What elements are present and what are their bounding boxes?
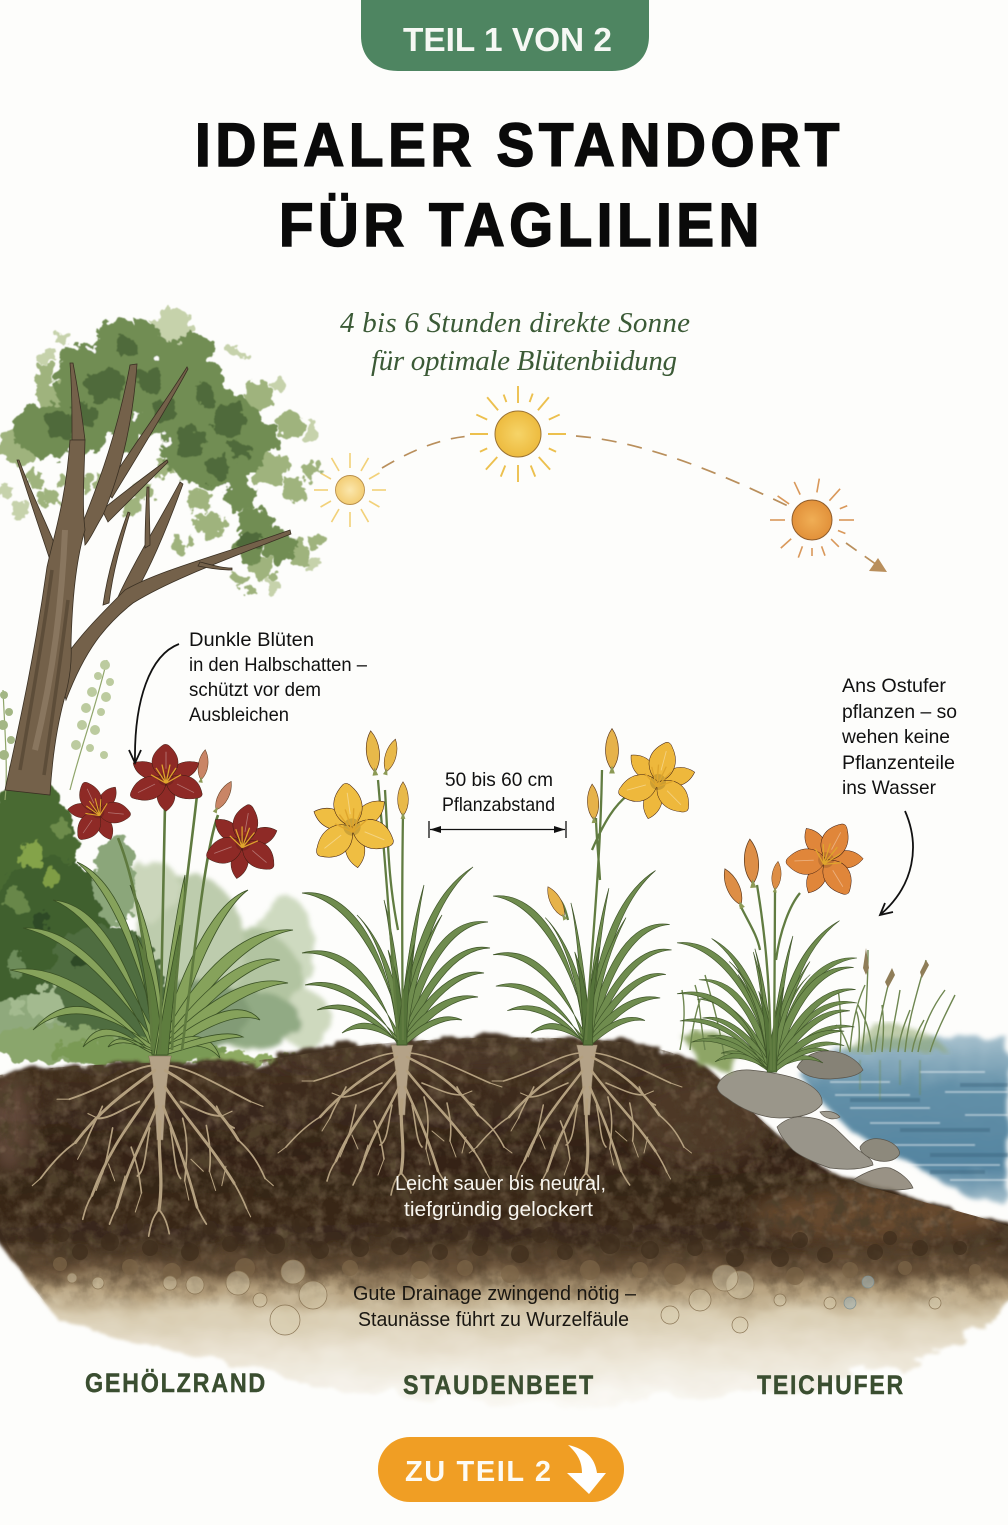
callout: dark flowers in partial shade: in den Halbschatten – [189,654,367,676]
callout: dark flowers in partial shade: Ausbleichen [189,704,289,726]
sun: morning [314,453,386,527]
tree crown [0,308,322,595]
grass strip and reeds at pond [680,948,955,1072]
sun: evening [770,479,854,558]
flowers [54,744,289,886]
pond water [800,1037,1008,1207]
rocks on shore [717,1051,913,1190]
soil note: Leicht sauer bis neutral, [395,1172,606,1195]
drainage note: Staunässe führt zu Wurzelfäule [358,1309,629,1331]
callout: east shore planting: Ans Ostufer [842,675,946,697]
title: FÜR TAGLILIEN [279,191,764,259]
badge: Teil 1 von 2 [361,0,649,71]
sun: midday [470,386,566,482]
icon: curved down arrow [567,1445,606,1494]
location labels: TEICHUFER [757,1370,905,1400]
soil note [395,1172,606,1221]
plant: orange daylily at pond [677,806,881,1072]
soil note: tiefgründig gelockert [404,1198,593,1221]
callout: dark flowers in partial shade [129,629,367,763]
callout: east shore planting [841,675,957,915]
soil cross-section [0,1030,1008,1408]
badge: Teil 1 von 2: TEIL 1 VON 2 [403,21,612,58]
arrow to red flowers [129,644,179,763]
callout: east shore planting: wehen keine [841,726,950,748]
callout: east shore planting: Pflanzenteile [842,752,955,774]
tree trunk and branches [5,363,291,795]
drainage note [353,1283,637,1331]
background shrubs [0,780,330,1067]
fern sprigs beside trunk [0,660,114,800]
title [195,111,844,259]
button: to part 2 [378,1437,624,1502]
plant: yellow daylily, left bed [302,730,490,1045]
callout: east shore planting: ins Wasser [842,777,936,799]
plant: yellow daylily, right bed [493,729,709,1045]
callout: dark flowers in partial shade: schützt vor dem [189,679,321,701]
arrow to pond [880,811,913,915]
title: IDEALER STANDORT [195,111,844,179]
callout: plant spacing with dimension arrow: 50 bis 60 cm [445,769,553,791]
subtitle: sun hours: für optimale Blütenbiidung [371,345,677,377]
leaves: broad tuft [10,862,293,1058]
location labels: GEHÖLZRAND [85,1368,267,1398]
callout: east shore planting: pflanzen – so [842,701,957,723]
sun path arc with arrow [382,436,887,572]
callout: dark flowers in partial shade: Dunkle Blüten [189,629,314,651]
plant: dark red daylily at woodland edge [10,744,293,1058]
drainage note: Gute Drainage zwingend nötig – [353,1283,637,1305]
location labels: STAUDENBEET [403,1370,595,1400]
button: to part 2: ZU TEIL 2 [405,1456,551,1488]
subtitle: sun hours: 4 bis 6 Stunden direkte Sonne [340,307,690,339]
roots [32,1045,691,1236]
location labels [85,1368,905,1400]
callout: plant spacing with dimension arrow: Pflanzabstand [442,794,555,816]
subtitle: sun hours [340,307,690,377]
stems [118,795,218,1050]
callout: plant spacing with dimension arrow [429,769,566,838]
buds [196,749,236,815]
gravel layer pebbles [53,1217,981,1335]
